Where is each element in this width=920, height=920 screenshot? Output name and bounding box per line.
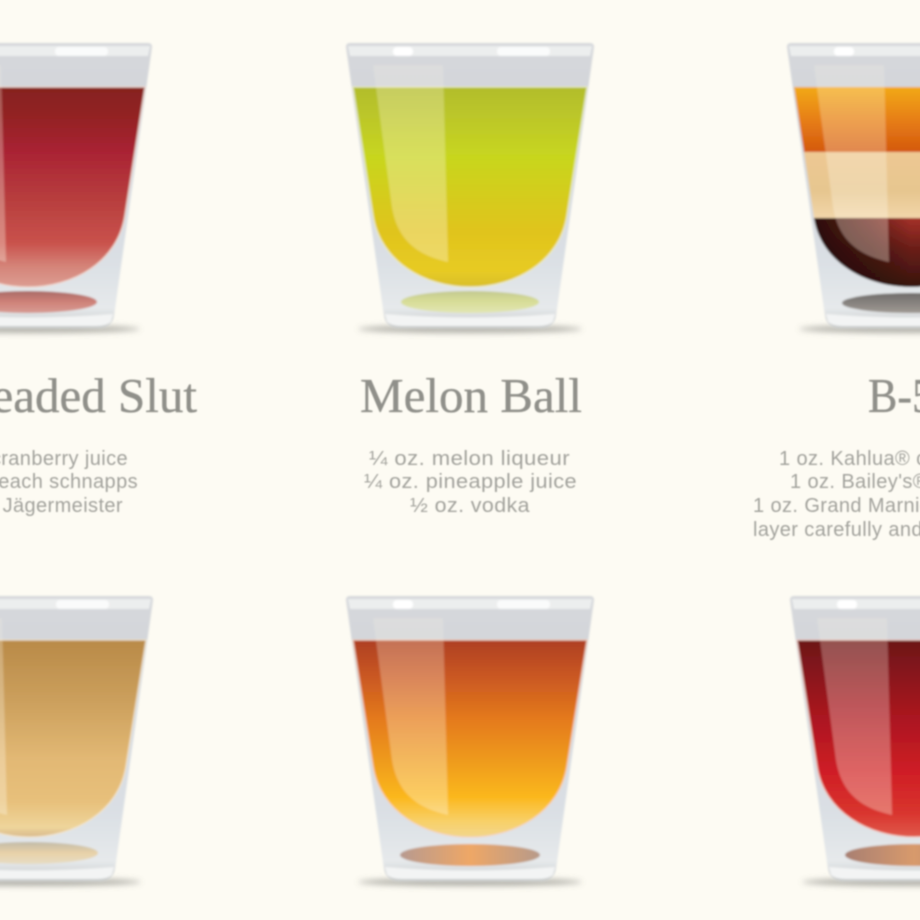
text block: Melon Ball ingredients: ½ oz. vodka (410, 495, 531, 517)
panel: red-headed shot glass (0, 43, 152, 333)
panel: melon ball shot glass (346, 43, 594, 333)
panel: orange shot glass (346, 596, 594, 886)
panel: B-52 layered shot glass (787, 43, 920, 333)
text block: Melon Ball ingredients (364, 448, 577, 517)
panel: tan shot glass (0, 596, 153, 886)
text block: Red-Headed Slut ingredients (0, 448, 138, 517)
text block: Melon Ball ingredients: ¼ oz. pineapple juice (364, 471, 577, 493)
panel: crimson shot glass (790, 596, 920, 886)
text block: B-52 ingredients (753, 448, 920, 541)
text block: Melon Ball ingredients: ¼ oz. melon liqueur (369, 448, 570, 470)
heading: Melon Ball: Melon Ball (360, 368, 582, 423)
